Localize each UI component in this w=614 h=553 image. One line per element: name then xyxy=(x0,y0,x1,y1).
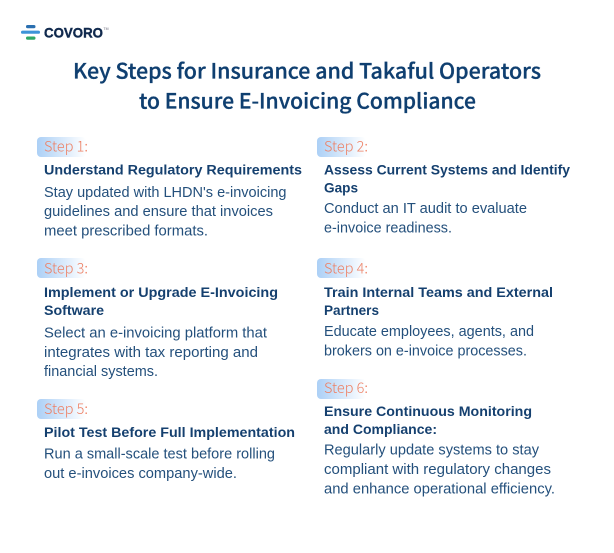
panel: step 4: Step 4: xyxy=(324,258,368,278)
panel: step 3: Software xyxy=(44,303,104,319)
panel: step 6: and Compliance: xyxy=(324,422,437,438)
panel: step 1: Stay updated with LHDN's e-invoicing xyxy=(44,185,286,201)
panel: step 2: Conduct an IT audit to evaluate xyxy=(324,201,527,217)
panel: step 2 xyxy=(317,136,570,236)
panel: step 2: Gaps xyxy=(324,180,358,196)
panel: step 5: Pilot Test Before Full Implementation xyxy=(44,425,295,441)
logo: Covoro: COVORO xyxy=(44,25,103,40)
panel: step 6: Ensure Continuous Monitoring xyxy=(324,404,532,420)
panel: step 3: Step 3: xyxy=(44,258,88,278)
title: to Ensure E-Invoicing Compliance xyxy=(139,86,476,116)
panel: step 4: brokers on e-invoice processes. xyxy=(324,344,527,360)
panel: step 1 xyxy=(37,136,302,240)
logo: Covoro xyxy=(21,25,109,40)
panel: step 4: Educate employees, agents, and xyxy=(324,324,534,340)
panel: step 2: e-invoice readiness. xyxy=(324,220,452,236)
panel: step 5: out e-invoices company-wide. xyxy=(44,466,237,482)
panel: step 5: Step 5: xyxy=(44,398,88,419)
panel: step 2: Step 2: xyxy=(324,136,368,156)
panel: step 6: Regularly update systems to stay xyxy=(324,442,540,458)
panel: step 2: Assess Current Systems and Identify xyxy=(324,162,570,178)
panel: step 3: Implement or Upgrade E-Invoicing xyxy=(44,285,278,301)
panel: step 1: Step 1: xyxy=(44,136,88,156)
panel: step 4 xyxy=(317,258,553,360)
panel: step 5: Run a small-scale test before rolling xyxy=(44,446,275,462)
panel: step 3: financial systems. xyxy=(44,364,158,380)
title xyxy=(73,56,541,116)
panel: step 1: Understand Regulatory Requirements xyxy=(44,162,302,178)
panel: step 4: Partners xyxy=(324,303,379,319)
panel: step 6 xyxy=(317,377,555,498)
panel: step 3: Select an e-invoicing platform that xyxy=(44,326,267,342)
panel: step 3: integrates with tax reporting and xyxy=(44,345,258,361)
panel: step 1: meet prescribed formats. xyxy=(44,224,208,240)
panel: step 6: compliant with regulatory changes xyxy=(324,462,551,478)
panel: step 6: Step 6: xyxy=(324,377,368,398)
panel: step 5 xyxy=(37,398,295,482)
title: Key Steps for Insurance and Takaful Operators xyxy=(73,56,541,86)
panel: step 6: and enhance operational efficiency. xyxy=(324,482,555,498)
panel: step 4: Train Internal Teams and External xyxy=(324,285,553,301)
panel: step 1: guidelines and ensure that invoices xyxy=(44,204,273,220)
panel: step 3 xyxy=(37,258,278,380)
logo: Covoro: TM xyxy=(104,27,109,31)
